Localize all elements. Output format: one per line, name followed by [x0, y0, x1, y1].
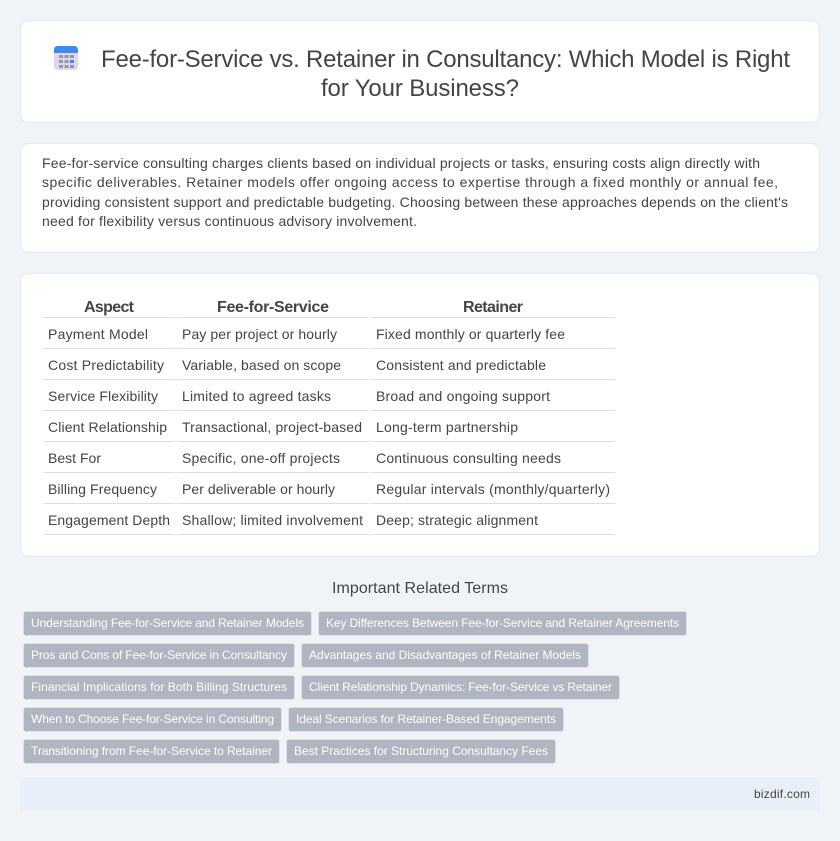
tag: Advantages and Disadvantages of Retainer Models [309, 648, 581, 662]
title [101, 46, 790, 102]
panel: title card [20, 20, 820, 122]
tag [24, 740, 280, 764]
title: for Your Business? [321, 75, 519, 102]
row: Best For: Continuous consulting needs [376, 450, 561, 466]
footer [20, 777, 820, 811]
tag: Pros and Cons of Fee-for-Service in Consultancy [31, 648, 287, 662]
tag: Understanding Fee-for-Service and Retainer Models [31, 616, 304, 630]
panel: introduction text: specific deliverables. Retainer models offer ongoing access to expertise through a fixed monthly or annual fee, [42, 174, 778, 190]
table header: Fee-for-Service [217, 299, 329, 316]
row: Cost Predictability: Consistent and predictable [376, 357, 546, 373]
row: Best For [48, 450, 561, 466]
tag: Transitioning from Fee-for-Service to Retainer [31, 744, 272, 758]
tag [288, 708, 564, 732]
row: Cost Predictability: Variable, based on scope [182, 357, 341, 373]
row: Client Relationship [48, 419, 518, 435]
row: Engagement Depth: Deep; strategic alignment [376, 512, 538, 528]
row: Payment Model: Payment Model [48, 326, 148, 342]
row: Engagement Depth [48, 512, 538, 528]
row: Service Flexibility: Broad and ongoing support [376, 388, 550, 404]
row: Billing Frequency: Billing Frequency [48, 481, 157, 497]
panel: introduction text: need for flexibility versus continuous advisory involvement. [42, 213, 417, 229]
tag: When to Choose Fee-for-Service in Consulting [31, 712, 274, 726]
tag [318, 612, 686, 636]
table header [84, 299, 523, 316]
icon: calendar [54, 46, 78, 70]
row: Billing Frequency: Per deliverable or hourly [182, 481, 335, 497]
row: Billing Frequency: Regular intervals (monthly/quarterly) [376, 481, 610, 497]
row: Service Flexibility [48, 388, 550, 404]
panel: introduction text [20, 144, 820, 252]
tag: Ideal Scenarios for Retainer-Based Engagements [296, 712, 556, 726]
table header: Aspect [84, 299, 135, 316]
row: Client Relationship: Long-term partnership [376, 419, 518, 435]
row: Cost Predictability [48, 357, 546, 373]
row: Best For: Specific, one-off projects [182, 450, 340, 466]
row: Service Flexibility: Service Flexibility [48, 388, 158, 404]
row: Billing Frequency [48, 481, 610, 497]
row: Service Flexibility: Limited to agreed tasks [182, 388, 331, 404]
tag [302, 644, 588, 668]
tag [286, 740, 556, 764]
tag: Key Differences Between Fee-for-Service and Retainer Agreements [326, 616, 679, 630]
row: Payment Model: Fixed monthly or quarterly fee [376, 326, 565, 342]
row: Engagement Depth: Engagement Depth [48, 512, 170, 528]
tag: Best Practices for Structuring Consultancy Fees [294, 744, 548, 758]
tag: Financial Implications for Both Billing Structures [31, 680, 287, 694]
row: Best For: Best For [48, 450, 101, 466]
title: Fee-for-Service vs. Retainer in Consultancy: Which Model is Right [101, 46, 790, 73]
row: Client Relationship: Client Relationship [48, 419, 167, 435]
tag: Client Relationship Dynamics: Fee-for-Service vs Retainer [309, 680, 612, 694]
table header: Retainer [463, 299, 523, 316]
panel: introduction text: Fee-for-service consulting charges clients based on individual projects or tasks, ensuring costs align directly with [42, 155, 760, 171]
tag [24, 708, 282, 732]
panel: comparison table [20, 274, 820, 556]
tag [24, 644, 294, 668]
row: Payment Model: Pay per project or hourly [182, 326, 337, 342]
panel: introduction text: providing consistent support and predictable budgeting. Choosing between these approaches depends on the client's [42, 194, 788, 210]
row: Payment Model [48, 326, 565, 342]
row: Client Relationship: Transactional, project-based [182, 419, 362, 435]
row: Engagement Depth: Shallow; limited involvement [182, 512, 363, 528]
heading: Important Related Terms: Important Related Terms [332, 580, 508, 597]
related term tags [24, 612, 686, 764]
tag [24, 612, 312, 636]
row: Cost Predictability: Cost Predictability [48, 357, 164, 373]
footer: bizdif.com [754, 787, 810, 801]
tag [302, 676, 620, 700]
tag [24, 676, 294, 700]
